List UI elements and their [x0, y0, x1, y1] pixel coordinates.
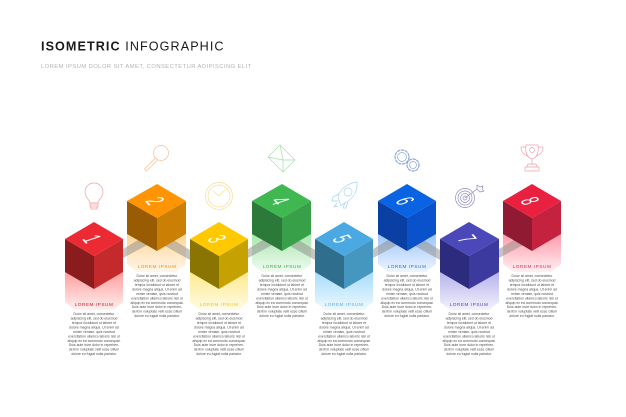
icon: gears — [395, 150, 419, 171]
paragraph 1: minim veniam, quis nostrud — [73, 330, 115, 334]
paragraph 6: aliquip ex ea commodo consequat. — [380, 301, 434, 305]
step 7 — [440, 185, 499, 356]
icon: clock — [206, 182, 232, 210]
paragraph 5: adipiscing elit, sed do eiusmod — [321, 316, 367, 320]
panel: step 2 — [127, 234, 186, 272]
icon: trophy — [521, 145, 543, 171]
cube 2 — [127, 184, 186, 251]
paragraph 7: adipiscing elit, sed do eiusmod — [446, 316, 492, 320]
panel: step 6 — [378, 234, 436, 272]
title: ISOMETRIC INFOGRAPHIC — [41, 40, 225, 54]
paragraph 3: dolore eu fugiat nulla pariatur. — [196, 352, 242, 356]
paragraph 4: adipiscing elit, sed do eiusmod — [259, 278, 305, 282]
cube 6 — [378, 184, 436, 251]
paragraph 3: dolore magna aliqua. Ut enim ad — [194, 325, 244, 329]
label 8: LOREM IPSUM — [513, 264, 551, 269]
paragraph 8: tempor incididunt ut labore et — [510, 283, 554, 287]
number 3: 3 — [201, 232, 232, 246]
step 3 — [190, 182, 248, 356]
panel: step 4 — [252, 234, 311, 272]
cube 8 — [503, 184, 561, 251]
step 2 — [127, 146, 186, 318]
number 1: 1 — [76, 232, 107, 246]
paragraph 1: tempor incididunt ut labore et — [72, 321, 116, 325]
paragraph 2: aliquip ex ea commodo consequat. — [130, 301, 184, 305]
paragraph 2: exercitation ullamco laboris nisi ut — [131, 296, 183, 300]
paragraph 8: Duis aute irure dolor in reprehen- — [507, 305, 557, 309]
paragraph 7: derit in voluptate velit esse cillum — [444, 348, 494, 352]
paragraph 5: dolore magna aliqua. Ut enim ad — [319, 325, 369, 329]
connector bands — [123, 239, 527, 260]
paragraph 4: exercitation ullamco laboris nisi ut — [256, 296, 308, 300]
step 8 — [503, 145, 561, 318]
paragraph 7: dolore magna aliqua. Ut enim ad — [444, 325, 494, 329]
paragraph 2: minim veniam, quis nostrud — [136, 292, 178, 296]
paragraph 6: adipiscing elit, sed do eiusmod — [384, 278, 430, 282]
paragraph 3: exercitation ullamco laboris nisi ut — [193, 334, 245, 338]
paragraph 1: aliquip ex ea commodo consequat. — [67, 339, 121, 343]
icon: magnifier — [144, 146, 168, 171]
panel: step 3 — [190, 272, 248, 310]
label 6: LOREM IPSUM — [388, 264, 426, 269]
paragraph 8: dolore eu fugiat nulla pariatur. — [509, 314, 555, 318]
label 3: LOREM IPSUM — [200, 302, 238, 307]
paragraph 6: tempor incididunt ut labore et — [385, 283, 429, 287]
paragraph 5: Duis aute irure dolor in reprehen- — [319, 343, 369, 347]
paragraph 1: exercitation ullamco laboris nisi ut — [68, 334, 120, 338]
paragraph 2: derit in voluptate velit esse cillum — [132, 310, 182, 314]
paragraph 1: dolore magna aliqua. Ut enim ad — [69, 325, 119, 329]
paragraph 7: minim veniam, quis nostrud — [448, 330, 490, 334]
cube 5 — [315, 222, 373, 289]
paragraph 2: Duis aute irure dolor in reprehen- — [132, 305, 182, 309]
paragraph 4: minim veniam, quis nostrud — [261, 292, 303, 296]
number 8: 8 — [514, 194, 545, 208]
paragraph 4: dolore magna aliqua. Ut enim ad — [257, 287, 307, 291]
cube 4 — [252, 184, 311, 251]
icon: target — [456, 185, 484, 208]
paragraph 7: dolore eu fugiat nulla pariatur. — [446, 352, 492, 356]
paragraph 3: aliquip ex ea commodo consequat. — [192, 339, 246, 343]
paragraph 8: aliquip ex ea commodo consequat. — [505, 301, 559, 305]
panel: step 1 — [65, 272, 123, 310]
cube 3 — [190, 222, 248, 289]
paragraph 8: Dolor sit amet, consectetur — [512, 274, 553, 278]
paragraph 8: exercitation ullamco laboris nisi ut — [506, 296, 558, 300]
paragraph 6: exercitation ullamco laboris nisi ut — [381, 296, 433, 300]
paragraph 4: aliquip ex ea commodo consequat. — [255, 301, 309, 305]
label 7: LOREM IPSUM — [450, 302, 488, 307]
paragraph 5: minim veniam, quis nostrud — [323, 330, 365, 334]
paragraph 4: dolore eu fugiat nulla pariatur. — [259, 314, 305, 318]
paragraph 2: Dolor sit amet, consectetur — [137, 274, 178, 278]
panel: step 5 — [315, 272, 373, 310]
paragraph 1: derit in voluptate velit esse cillum — [69, 348, 119, 352]
paragraph 7: Duis aute irure dolor in reprehen- — [444, 343, 494, 347]
paragraph 3: Duis aute irure dolor in reprehen- — [194, 343, 244, 347]
icon: rocket — [332, 182, 357, 208]
paragraph 2: dolore eu fugiat nulla pariatur. — [134, 314, 180, 318]
paragraph 6: derit in voluptate velit esse cillum — [382, 310, 432, 314]
subtitle: LOREM IPSUM DOLOR SIT AMET, CONSECTETUR ADIPISCING ELIT — [41, 64, 252, 70]
number 2: 2 — [139, 194, 170, 208]
panel: step 8 — [503, 234, 561, 272]
paragraph 1: Dolor sit amet, consectetur — [74, 312, 115, 316]
icon: envelope — [268, 145, 295, 172]
panel: step 7 — [440, 272, 499, 310]
paragraph 4: tempor incididunt ut labore et — [260, 283, 304, 287]
paragraph 4: Dolor sit amet, consectetur — [262, 274, 303, 278]
paragraph 5: dolore eu fugiat nulla pariatur. — [321, 352, 367, 356]
paragraph 1: adipiscing elit, sed do eiusmod — [71, 316, 117, 320]
paragraph 7: exercitation ullamco laboris nisi ut — [443, 334, 495, 338]
paragraph 4: Duis aute irure dolor in reprehen- — [257, 305, 307, 309]
paragraph 7: tempor incididunt ut labore et — [447, 321, 491, 325]
paragraph 6: Duis aute irure dolor in reprehen- — [382, 305, 432, 309]
paragraph 1: dolore eu fugiat nulla pariatur. — [71, 352, 117, 356]
paragraph 7: aliquip ex ea commodo consequat. — [442, 339, 496, 343]
paragraph 5: derit in voluptate velit esse cillum — [319, 348, 369, 352]
paragraph 5: Dolor sit amet, consectetur — [324, 312, 365, 316]
cube 1 — [65, 222, 123, 289]
paragraph 4: derit in voluptate velit esse cillum — [257, 310, 307, 314]
label 5: LOREM IPSUM — [325, 302, 363, 307]
paragraph 1: Duis aute irure dolor in reprehen- — [69, 343, 119, 347]
paragraph 5: exercitation ullamco laboris nisi ut — [318, 334, 370, 338]
panels under the cubes — [65, 234, 561, 310]
step 5 — [315, 182, 373, 356]
paragraph 3: adipiscing elit, sed do eiusmod — [196, 316, 242, 320]
paragraph 3: tempor incididunt ut labore et — [197, 321, 241, 325]
paragraph 3: Dolor sit amet, consectetur — [199, 312, 240, 316]
step 6 — [378, 150, 436, 318]
step 1 — [65, 183, 123, 356]
paragraph 2: dolore magna aliqua. Ut enim ad — [132, 287, 182, 291]
paragraph 6: Dolor sit amet, consectetur — [387, 274, 428, 278]
label 4: LOREM IPSUM — [263, 264, 301, 269]
paragraph 3: minim veniam, quis nostrud — [198, 330, 240, 334]
paragraph 8: adipiscing elit, sed do eiusmod — [509, 278, 555, 282]
number 6: 6 — [389, 194, 420, 208]
paragraph 6: minim veniam, quis nostrud — [386, 292, 428, 296]
number 5: 5 — [326, 232, 357, 246]
cube 7 — [440, 222, 499, 289]
number 4: 4 — [264, 194, 295, 208]
paragraph 5: tempor incididunt ut labore et — [322, 321, 366, 325]
paragraph 3: derit in voluptate velit esse cillum — [194, 348, 244, 352]
paragraph 6: dolore magna aliqua. Ut enim ad — [382, 287, 432, 291]
paragraph 2: tempor incididunt ut labore et — [135, 283, 179, 287]
paragraph 7: Dolor sit amet, consectetur — [449, 312, 490, 316]
paragraph 5: aliquip ex ea commodo consequat. — [317, 339, 371, 343]
step 4 — [252, 145, 311, 318]
label 1: LOREM IPSUM — [75, 302, 113, 307]
icon: light bulb — [85, 183, 103, 209]
paragraph 6: dolore eu fugiat nulla pariatur. — [384, 314, 430, 318]
paragraph 2: adipiscing elit, sed do eiusmod — [134, 278, 180, 282]
label 2: LOREM IPSUM — [138, 264, 176, 269]
paragraph 8: minim veniam, quis nostrud — [511, 292, 553, 296]
paragraph 8: derit in voluptate velit esse cillum — [507, 310, 557, 314]
number 7: 7 — [451, 232, 482, 246]
paragraph 8: dolore magna aliqua. Ut enim ad — [507, 287, 557, 291]
